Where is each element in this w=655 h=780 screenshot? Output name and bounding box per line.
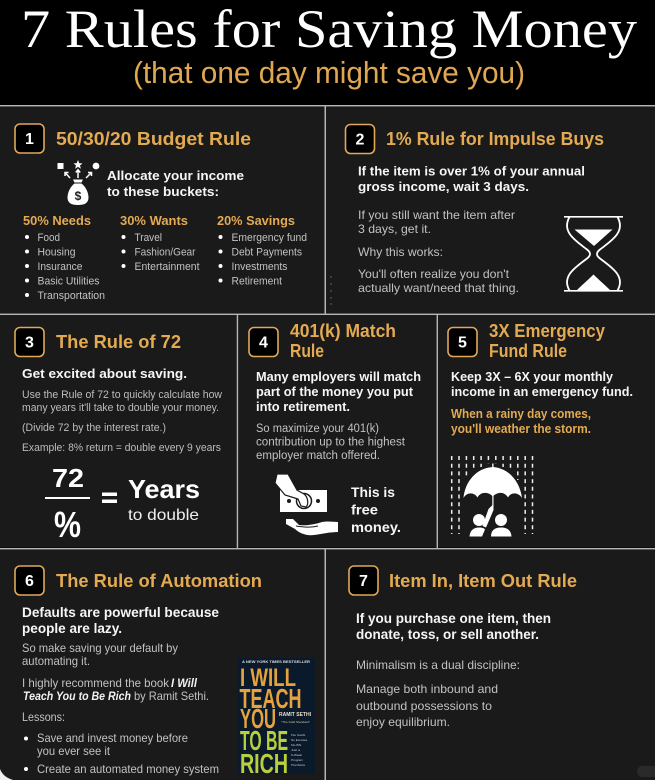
body text: Manage both inbound and (356, 682, 498, 696)
column: wants: Entertainment (134, 261, 200, 273)
panel: rule 2 impulse buys (326, 107, 655, 313)
heading: 50/30/20 Budget Rule (56, 128, 251, 149)
column: wants: Travel (134, 232, 162, 244)
body text: Example: 8% return = double every 9 years (22, 442, 221, 454)
lead text (22, 605, 219, 636)
column: savings: Emergency fund (232, 232, 307, 244)
lead text: Defaults are powerful because (22, 605, 219, 620)
heading (489, 320, 606, 361)
book cover: No Excuses. (291, 738, 308, 742)
body text: If you still want the item after (358, 208, 515, 222)
body text: So make saving your default by (22, 641, 178, 655)
badge 7 (349, 566, 378, 595)
icon: money bag (58, 160, 99, 205)
badge 6 (15, 566, 44, 595)
body text (358, 208, 519, 295)
lead text: If you purchase one item, then (356, 611, 551, 626)
lead text: income in an emergency fund. (451, 384, 633, 399)
intro text: Allocate your income (107, 168, 244, 183)
book cover: Program (291, 758, 304, 762)
icon: hourglass (564, 217, 623, 291)
lead text: Many employers will match (256, 369, 421, 384)
column: needs: Insurance (38, 261, 82, 273)
body text: I Will (171, 676, 198, 690)
column: needs: Housing (38, 246, 76, 258)
heading: Rule (290, 340, 324, 361)
lessons list: Create an automated money system (37, 762, 219, 776)
heading: Fund Rule (489, 340, 567, 361)
subtitle: (that one day might save you) (133, 55, 525, 90)
badge 5 (448, 328, 477, 356)
lead text: part of the money you put (256, 384, 414, 399)
column: needs: 50% Needs (23, 213, 91, 228)
body text: automating it. (22, 654, 90, 668)
body text (22, 641, 209, 724)
column: savings: 20% Savings (217, 213, 295, 228)
book cover: No BS. (291, 743, 302, 747)
corner mark (0, 769, 13, 780)
lead text: people are lazy. (22, 621, 122, 636)
icon: money bag: $ (75, 189, 82, 203)
body text: You'll often realize you don't (358, 267, 510, 281)
body text: Minimalism is a dual discipline: (356, 658, 520, 672)
book cover: RICH (240, 748, 288, 779)
body text: (Divide 72 by the interest rate.) (22, 422, 166, 434)
body text: actually want/need that thing. (358, 281, 519, 295)
lead text: donate, toss, or sell another. (356, 627, 539, 642)
lead text (256, 369, 421, 414)
body text: 3 days, get it. (358, 222, 431, 236)
body text: Use the Rule of 72 to quickly calculate how (22, 389, 222, 401)
body text: Teach You to Be Rich (23, 689, 131, 703)
lead text: If the item is over 1% of your annual (358, 164, 585, 178)
formula: to double (128, 507, 199, 524)
callout: free money: money. (351, 519, 401, 535)
book cover: A NEW YORK TIMES BESTSELLER (242, 660, 311, 664)
column: needs: Food (38, 232, 60, 244)
heading: 401(k) Match (290, 320, 396, 341)
callout: free money: This is (351, 484, 395, 500)
book cover: No Guilt. (291, 733, 306, 737)
highlight text: When a rainy day comes, (451, 407, 591, 421)
lessons list (24, 731, 219, 776)
badge 3 (15, 328, 44, 356)
lead text: into retirement. (256, 399, 350, 414)
book cover: 6-Week (291, 753, 303, 757)
icon: umbrella in rain (452, 456, 532, 536)
lead text: Get excited about saving. (22, 366, 187, 381)
column: wants: Fashion/Gear (134, 246, 196, 258)
body text: Lessons: (22, 710, 65, 724)
formula: Years (128, 474, 200, 504)
heading: 3X Emergency (489, 320, 606, 341)
watermark pill (637, 766, 655, 777)
book cover: YOU (240, 703, 276, 734)
badge 4: 4 (259, 334, 268, 352)
panel: rule 3 rule of 72 (0, 315, 236, 548)
body text (22, 389, 222, 454)
intro text: to these buckets: (107, 184, 219, 199)
heading: 1% Rule for Impulse Buys (386, 128, 604, 149)
dots (330, 276, 332, 305)
badge 2 (346, 124, 374, 154)
heading: The Rule of 72 (56, 331, 181, 352)
lessons list: you ever see it (37, 744, 111, 758)
body text: by Ramit Sethi. (134, 689, 209, 703)
badge 1: 1 (25, 131, 34, 148)
intro text (107, 168, 244, 199)
body text: many years it'll take to double your money. (22, 402, 219, 414)
lead text (356, 611, 551, 642)
heading: Item In, Item Out Rule (389, 570, 577, 591)
body text: employer match offered. (256, 450, 380, 462)
book cover: "The Gold Standard" (281, 721, 310, 724)
panel: rule 5 emergency fund (438, 315, 655, 548)
lead text (451, 369, 633, 399)
body text: Why this works: (358, 245, 443, 259)
book cover: Just a (291, 748, 300, 752)
callout: free money (351, 484, 401, 535)
panel: rule 7 item in item out (326, 550, 655, 780)
badge 7: 7 (359, 573, 368, 590)
column: savings: Investments (232, 261, 288, 273)
badge 2: 2 (356, 132, 365, 148)
heading: The Rule of Automation (56, 570, 262, 591)
body text: I highly recommend the book (22, 676, 170, 690)
callout: free money: free (351, 502, 378, 518)
column: savings (217, 213, 307, 288)
column: wants: 30% Wants (120, 213, 188, 228)
badge 3: 3 (25, 334, 34, 352)
lead text (358, 164, 585, 194)
book cover: RAMIT SETHI (279, 712, 311, 718)
panel: rule 6 automation (0, 550, 324, 780)
column: needs (23, 213, 105, 302)
formula (45, 463, 200, 545)
heading (290, 320, 396, 361)
formula: 72 (52, 463, 84, 493)
panel: rule 4 401k match (238, 315, 436, 548)
badge 1 (15, 124, 44, 153)
book cover: TEACH (240, 683, 302, 714)
body text: contribution up to the highest (256, 436, 406, 448)
lead text: Keep 3X – 6X your monthly (451, 369, 614, 384)
book cover: I WILL (240, 664, 296, 692)
panel: rule 1 budget (0, 107, 324, 313)
highlight text: you'll weather the storm. (451, 422, 591, 436)
highlight text (451, 407, 591, 436)
column: savings: Retirement (232, 276, 282, 288)
column: needs: Basic Utilities (38, 276, 100, 288)
formula: % (54, 504, 81, 545)
book cover: TO BE (240, 725, 288, 756)
badge 5: 5 (458, 334, 467, 352)
book cover (238, 658, 315, 779)
icon: hand giving money (275, 474, 338, 535)
column: wants (120, 213, 200, 273)
lead text: gross income, wait 3 days. (358, 179, 529, 194)
body text (256, 423, 406, 462)
column: savings: Debt Payments (232, 246, 302, 258)
badge 6: 6 (25, 573, 34, 590)
lessons list: Save and invest money before (37, 731, 188, 745)
body text (356, 658, 520, 729)
body text: enjoy equilibrium. (356, 715, 450, 729)
body text: outbound possessions to (356, 699, 492, 713)
column: needs: Transportation (38, 290, 105, 302)
body text: So maximize your 401(k) (256, 423, 379, 435)
badge 4 (249, 328, 278, 356)
title: 7 Rules for Saving Money (21, 0, 637, 59)
book cover: That Works (291, 763, 305, 767)
